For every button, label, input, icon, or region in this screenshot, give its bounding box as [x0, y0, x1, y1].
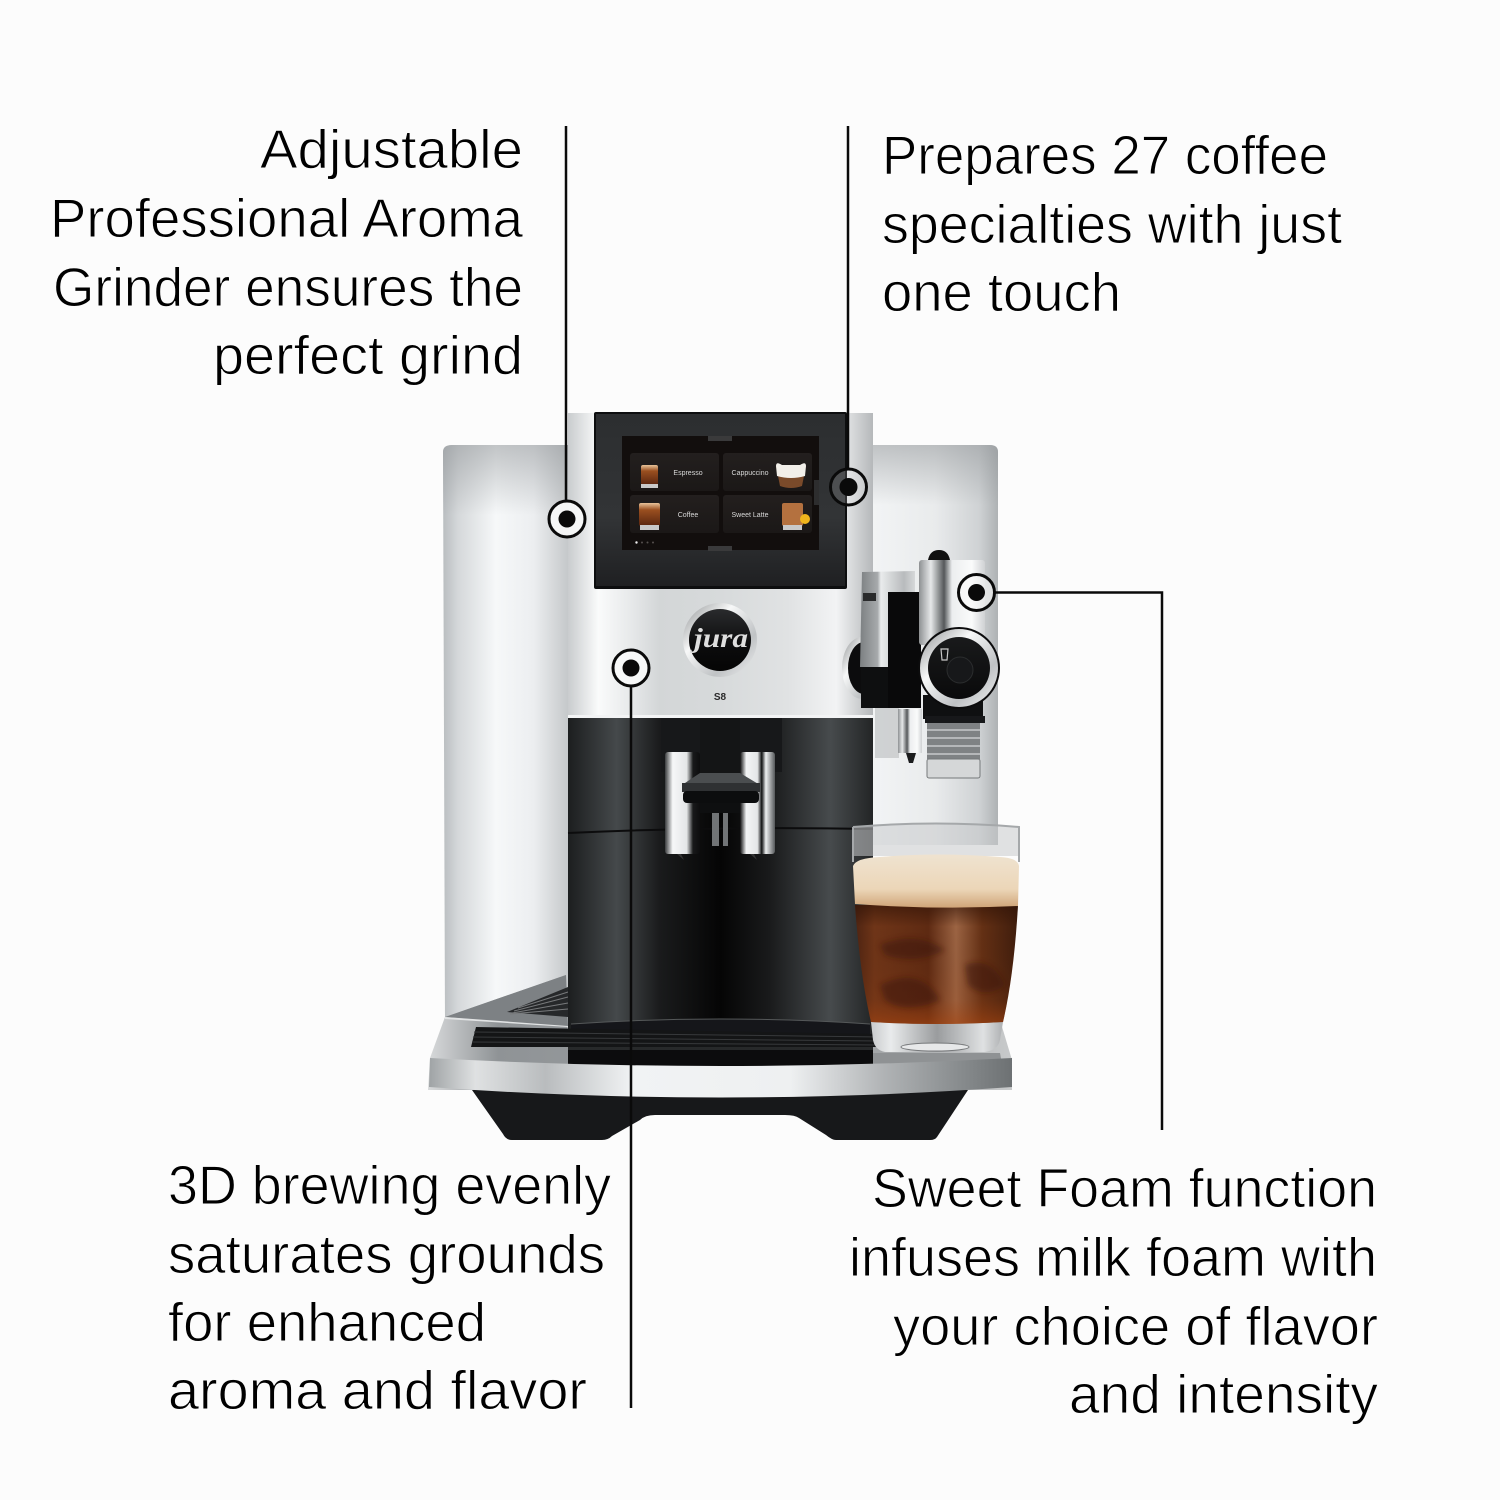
jura logo badge: jura: [689, 623, 748, 653]
text: adjustable grinder: Professional Aroma: [50, 187, 523, 249]
text: 3D brewing: for enhanced: [168, 1291, 486, 1353]
text: coffee specialties: specialties with just: [882, 193, 1342, 255]
callout: grinder pointer: [549, 126, 585, 537]
coffee machine: [428, 412, 1019, 1140]
text: 3D brewing: aroma and flavor: [168, 1359, 587, 1421]
milk system cylinder: [919, 550, 985, 723]
black lower front: [568, 715, 873, 1040]
tile: Cappuccino: Cappuccino: [732, 470, 769, 477]
text: coffee specialties: [882, 124, 1342, 323]
tile: Sweet Latte: [723, 495, 812, 533]
milk dial: [918, 627, 1000, 709]
callout: one touch pointer: [830, 126, 866, 505]
jura logo badge: [683, 603, 757, 677]
text: sweet foam: your choice of flavor: [893, 1295, 1378, 1357]
text: 3D brewing: [168, 1154, 611, 1421]
glass of coffee: [853, 824, 1019, 1052]
callout: sweet foam pointer: [958, 574, 1162, 1130]
coffee outlet: [661, 718, 782, 860]
tile: Espresso: Espresso: [673, 470, 703, 477]
text: coffee specialties: one touch: [882, 261, 1121, 323]
tile: Sweet Latte: Sweet Latte: [732, 512, 769, 519]
chrome upper front: [568, 413, 873, 718]
drip grille: [471, 1027, 880, 1047]
tile: Cappuccino: [723, 453, 812, 491]
text: sweet foam: Sweet Foam function: [872, 1157, 1377, 1219]
callout: 3D brewing pointer: [613, 650, 649, 1408]
left knob: [842, 637, 882, 699]
drip tray top plate: [428, 975, 1012, 1090]
page dots: [635, 541, 654, 544]
tile: Coffee: Coffee: [678, 512, 698, 519]
chrome front strip: [429, 1058, 1012, 1098]
right tank: [872, 445, 998, 845]
left water tank: [443, 445, 569, 1025]
text: adjustable grinder: Adjustable: [260, 118, 523, 180]
text: adjustable grinder: Grinder ensures the: [53, 256, 523, 318]
milk container: [927, 723, 980, 778]
tile: Espresso: [630, 453, 719, 491]
hot water unit: [860, 571, 922, 763]
text: adjustable grinder: [50, 118, 523, 386]
text: 3D brewing: saturates grounds: [168, 1223, 605, 1285]
feet: [472, 1090, 968, 1140]
text: sweet foam: and intensity: [1069, 1363, 1378, 1425]
text: sweet foam: [849, 1157, 1378, 1425]
text: coffee specialties: Prepares 27 coffee: [882, 124, 1328, 186]
tile: Coffee: [630, 495, 719, 533]
cup platform reflection: [568, 1047, 1002, 1066]
model name: S8: [714, 692, 727, 703]
text: 3D brewing: 3D brewing evenly: [168, 1154, 611, 1216]
text: sweet foam: infuses milk foam with: [849, 1226, 1377, 1288]
text: adjustable grinder: perfect grind: [213, 324, 523, 386]
touchscreen: [594, 412, 847, 589]
